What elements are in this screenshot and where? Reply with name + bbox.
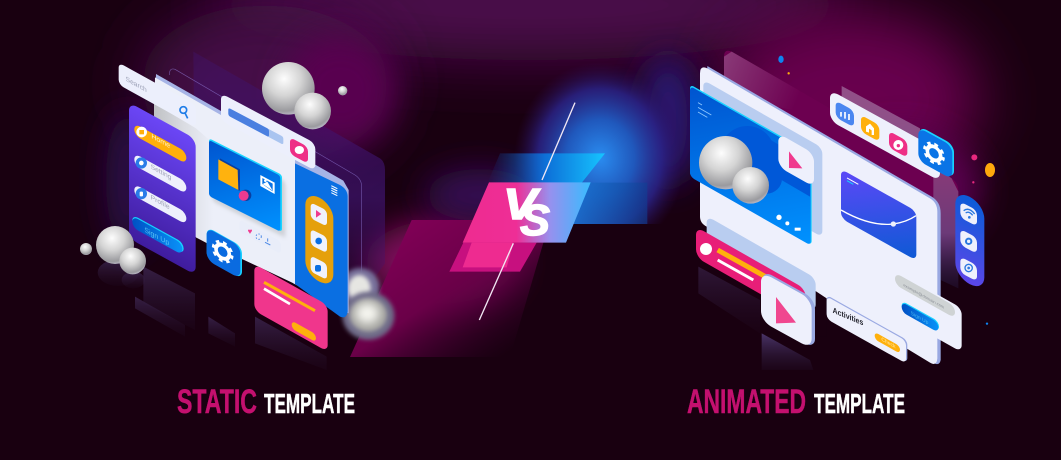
- lower sphere: [96, 226, 134, 264]
- image icon: [260, 175, 275, 194]
- lower pink parallelogram: [449, 243, 537, 272]
- panel bottom cut: [814, 290, 827, 337]
- orange line: [264, 282, 315, 311]
- avatar: [700, 243, 712, 255]
- reflections: [98, 259, 327, 370]
- email field: example@domain.com: [903, 282, 945, 310]
- purple menu panel: [129, 102, 196, 275]
- gear icon: [925, 140, 943, 166]
- blue lower strip: [573, 183, 647, 224]
- main vs parallelogram: [463, 182, 591, 243]
- chart card: [841, 169, 916, 261]
- settings card: [918, 126, 954, 179]
- setting button: Setting: [151, 163, 171, 182]
- sphere: [294, 93, 331, 129]
- title: animated template: ANIMATED: [687, 383, 806, 421]
- title: static template: STATIC: [177, 383, 257, 421]
- sign up button: Sign Up: [144, 225, 169, 247]
- video dark shape: [720, 126, 810, 197]
- video sphere large: [699, 136, 752, 189]
- video sphere small: [732, 167, 769, 204]
- cloud icon: [290, 137, 308, 164]
- camera tile: [960, 229, 977, 254]
- background glow: [106, 0, 980, 304]
- vs text: S: [520, 196, 550, 245]
- magnifier icon: [180, 107, 188, 118]
- title: static template: TEMPLATE: [264, 388, 355, 419]
- tiny sphere: [80, 243, 92, 255]
- home icon: [861, 115, 879, 142]
- setting button: [134, 153, 186, 194]
- email form card: [895, 272, 962, 352]
- main panel edge: [154, 74, 349, 313]
- play triangle: [776, 297, 796, 323]
- divider line bottom: [479, 243, 513, 320]
- vs text: [503, 180, 550, 245]
- pink notification bar: [696, 227, 806, 320]
- blue glow behind VS: [518, 67, 678, 224]
- cloud icon: [889, 131, 907, 158]
- main panel edge: [703, 66, 941, 364]
- video card: [690, 84, 812, 245]
- blurred spheres: [341, 268, 394, 340]
- sign up button: Sign Up: [911, 311, 928, 326]
- sign up button: [132, 215, 184, 255]
- location tile: [960, 257, 977, 281]
- icon bar: [830, 86, 940, 181]
- white line: [718, 260, 753, 280]
- lower small sphere: [119, 248, 146, 274]
- main panel: [700, 67, 937, 364]
- profile button: [134, 184, 186, 225]
- activities label: Activities: [833, 305, 864, 328]
- large blue card: [209, 138, 285, 238]
- blue column: [295, 163, 348, 317]
- light shade panel: [707, 216, 816, 311]
- orange cube: [220, 158, 240, 191]
- orange line: [718, 250, 767, 277]
- white line: [264, 289, 290, 304]
- gear icon: [213, 239, 232, 265]
- search card: [119, 63, 196, 127]
- small sphere: [338, 86, 347, 95]
- video tile: [311, 256, 327, 280]
- wifi tile: [960, 202, 977, 226]
- address card: [221, 93, 315, 171]
- large sphere: [262, 62, 315, 115]
- action bar: [239, 219, 281, 254]
- blue upper parallelogram: [487, 153, 605, 185]
- floating dots: [778, 56, 995, 325]
- illustration: static template: [80, 52, 394, 370]
- panel shade: [154, 103, 213, 247]
- illustration: animated template: [690, 51, 995, 370]
- chart heading lines: [847, 178, 858, 184]
- main panel: [154, 77, 295, 284]
- title: static template: [177, 383, 355, 421]
- pink dot: [239, 190, 251, 201]
- play tile: [311, 202, 327, 226]
- video actions: [776, 215, 801, 231]
- pink inner block: [463, 243, 513, 267]
- deep magenta parallelogram: [350, 220, 550, 357]
- right icon pill: [955, 189, 984, 292]
- chart point: [891, 221, 896, 227]
- chart icon: [836, 101, 854, 127]
- back magenta panel: [724, 51, 958, 217]
- action bar: ♥: [248, 227, 253, 236]
- vs text: V: [503, 180, 541, 229]
- profile button: Profile: [151, 193, 170, 211]
- progress bar: [228, 108, 283, 145]
- pink card: [254, 264, 328, 352]
- settings card: [207, 227, 242, 279]
- camera tile: [311, 229, 327, 253]
- search label: Search: [126, 75, 147, 94]
- video play card: [778, 133, 814, 187]
- back purple panel: [193, 52, 385, 317]
- column menu icon: [331, 186, 337, 196]
- activities card: [827, 295, 907, 363]
- orange button: [292, 321, 316, 342]
- home button: Home: [151, 131, 170, 150]
- back panel left highlight: [724, 52, 810, 113]
- spheres: [80, 62, 347, 274]
- play card: [761, 270, 815, 349]
- icon bar shade: [842, 86, 920, 150]
- video shade: [703, 80, 822, 237]
- orange icon pill: [305, 191, 333, 289]
- check button: Check: [881, 337, 896, 350]
- glass outline panel: [169, 69, 362, 309]
- back panel right strip: [933, 165, 958, 288]
- play reflection: [762, 333, 813, 370]
- video caption: [698, 103, 711, 117]
- vs badge: [350, 103, 647, 357]
- title: animated template: TEMPLATE: [814, 388, 905, 419]
- chart curve: [841, 210, 916, 224]
- pink bar reflection: [698, 267, 760, 333]
- divider line top: [542, 103, 575, 180]
- home button: [134, 123, 186, 164]
